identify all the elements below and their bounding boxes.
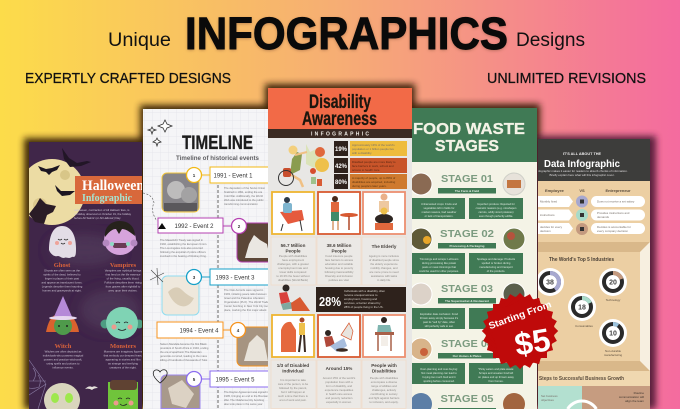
event 5 text bbox=[224, 391, 268, 406]
comparison: employee vs entrepreneur: demands bbox=[597, 215, 609, 219]
info card around 15%: experience inequalities bbox=[325, 388, 354, 392]
event 5 text: The Dayton Agreement was signed in bbox=[224, 390, 269, 394]
text: ghost description: Ghosts are often seen as the bbox=[44, 268, 80, 272]
donut: 18: 18 bbox=[578, 304, 586, 312]
donut: 10 non-durable manufacturing: manufacturing bbox=[604, 353, 623, 357]
header: Data Infographic bbox=[536, 139, 650, 181]
label: Vampires: Vampires bbox=[110, 262, 137, 269]
info card people with disabilities: People with bbox=[371, 363, 397, 368]
comparison: employee vs entrepreneur: Decides is accountable for bbox=[597, 225, 631, 229]
info card one third: 1/3 of Disabled bbox=[277, 363, 309, 368]
intro text: before All Saints' (or All Hallows') Day. bbox=[74, 216, 121, 220]
text: ghost description: spirits of the dead, believed to bbox=[43, 272, 81, 276]
icon: vampire bbox=[102, 221, 138, 255]
event 5 text: 1995, bringing an end to the Bosnian bbox=[224, 394, 268, 398]
stage 5: STAGE 05 bbox=[440, 393, 494, 405]
event 1 text: finalized in 1991, ending the era bbox=[224, 190, 263, 194]
event 2 text: The Los Angeles riots also occurred bbox=[160, 246, 203, 250]
info card 38.6 million: Diversity and inclusion bbox=[325, 274, 353, 278]
donut: 18: Consumables bbox=[575, 324, 593, 328]
heading: Designs: Designs bbox=[516, 30, 585, 51]
panel shadows bbox=[24, 84, 656, 409]
panel: Disability Awareness bbox=[268, 88, 412, 409]
event 1 text: Cold War. Additionally, the World bbox=[224, 194, 263, 198]
event 4: 4 bbox=[237, 328, 240, 333]
event 4 text: genocide occurred, leading to the mass bbox=[160, 354, 208, 358]
donut: 38: 38 bbox=[546, 280, 554, 286]
event 3 text bbox=[224, 289, 268, 312]
stat: 42%: 42% bbox=[335, 164, 348, 170]
text: monsters description: appearing in stories and film bbox=[106, 358, 141, 362]
event 5: 5 bbox=[193, 377, 196, 382]
stat: 19%: with a disability. bbox=[352, 151, 372, 155]
text: ghost description: and appear as translucent forms. bbox=[42, 280, 83, 284]
header: Food Waste Stages: FOOD WASTE bbox=[413, 121, 525, 138]
donut: 38 bbox=[536, 268, 564, 296]
event 3 text: Israel and the Palestine Liberation bbox=[224, 296, 265, 300]
stage 1: market reasons, bad weather bbox=[422, 210, 457, 214]
image card row 1 bbox=[272, 192, 405, 234]
text: witch description: powers and practice witchcraft, bbox=[44, 358, 82, 362]
stage 2: spoiled or broken during bbox=[482, 261, 511, 265]
stage 1: even though perfectly edible. bbox=[479, 214, 513, 218]
event 3 text: Organization (PLO). The World Trade bbox=[224, 300, 269, 304]
callout: 28% bbox=[316, 287, 406, 312]
stage 1: cosmetic reasons (e.g. misshapen bbox=[476, 206, 517, 210]
text: ghost description: Legends describe them haunting bbox=[42, 284, 83, 288]
icon: spider web bbox=[29, 360, 46, 409]
header: Disability Awareness bbox=[268, 88, 412, 138]
text: ghost description: homes and graveyards at night. bbox=[42, 288, 82, 292]
event 4 text: Nelson Mandela became the first Black bbox=[160, 342, 207, 346]
icon: monster bbox=[100, 307, 144, 339]
comparison: employee vs entrepreneur: Monthly fixed bbox=[540, 200, 557, 204]
info card people with disabilities: challenges, actively bbox=[372, 388, 397, 392]
event 1 bbox=[162, 167, 275, 212]
event 3 text: 1993, initiating peace talks between bbox=[224, 292, 267, 296]
steps diagram bbox=[538, 386, 650, 409]
title: INFOGRAPHICS: INFOGRAPHICS bbox=[185, 8, 508, 59]
event 4 text: the era of apartheid. The Rwandan bbox=[160, 350, 202, 354]
info card 56.7 million: lower skills compared bbox=[280, 270, 307, 274]
event 5: 1995 - Event 5 bbox=[215, 378, 255, 384]
banner: Halloween title: Infographic bbox=[82, 193, 132, 204]
illustration: seated woman bbox=[279, 284, 310, 311]
text: monsters description: that embody our deepest fears, bbox=[104, 354, 143, 358]
comparison: employee vs entrepreneur: Employee bbox=[545, 188, 565, 193]
event 2 text: involved in the beating of Rodney King. bbox=[160, 254, 207, 258]
text: monsters description: Monsters are imaginary figures bbox=[104, 350, 143, 354]
info card 38.6 million bbox=[317, 237, 361, 285]
text: witch description: influence events. bbox=[52, 366, 74, 370]
info card around 15%: Around 15% of the world's bbox=[323, 376, 356, 380]
event 2: 1992 - Event 2 bbox=[174, 224, 214, 230]
info card 38.6 million: People bbox=[331, 248, 347, 254]
event 4 text: killing of hundreds of thousands of Tutsi bbox=[160, 358, 208, 362]
info card people with disabilities: contributing to society bbox=[370, 392, 398, 396]
stage 1: Imperfect produce: Rejected for bbox=[477, 202, 515, 206]
label: Monsters: Monsters bbox=[110, 343, 136, 350]
info card the elderly: assistance with tasks bbox=[371, 274, 398, 278]
text: ghost description: linger in places of their past bbox=[45, 276, 79, 280]
header: Disability Awareness: INFOGRAPHIC bbox=[311, 132, 369, 138]
stage 1: vegetables left in fields for bbox=[423, 206, 455, 210]
stat: 19%: population or 1 billion people live bbox=[352, 147, 394, 151]
steps diagram: Set business bbox=[541, 394, 558, 398]
info card people with disabilities: Disabilities bbox=[372, 368, 397, 374]
comparison: employee vs entrepreneur: instructions bbox=[540, 213, 555, 217]
stage 4 bbox=[410, 338, 523, 384]
stage 2: STAGE 02 bbox=[440, 228, 494, 240]
stage 1: Unharvested crops: Fruits and bbox=[421, 202, 458, 206]
stage 3: The Supermarket & Restaurant bbox=[445, 299, 489, 303]
icon: sparkles bbox=[148, 120, 172, 146]
comparison: employee vs entrepreneur: VS bbox=[579, 188, 585, 193]
stage 1 bbox=[410, 173, 525, 219]
event 3: 1993 - Event 3 bbox=[215, 276, 255, 282]
event 2 text: The Maastricht Treaty was signed in bbox=[160, 238, 204, 242]
info card 56.7 million bbox=[271, 237, 316, 285]
stat: 80% bbox=[334, 174, 407, 189]
text: monsters description: as strange and terrifying bbox=[108, 362, 138, 366]
text: witch description bbox=[43, 350, 84, 370]
info card one third: care of the person, to be bbox=[278, 382, 309, 386]
comparison: employee vs entrepreneur: Entrepreneur bbox=[605, 188, 631, 193]
info card people with disabilities: and fight against barriers bbox=[369, 396, 400, 400]
event 2 bbox=[158, 218, 277, 262]
stage 3: Expiration date confusion: Food bbox=[420, 312, 458, 316]
stage 1: The Farm & Field bbox=[455, 189, 479, 193]
panel: Data Infographic bbox=[530, 139, 650, 409]
stage 2: manufacturing and transport bbox=[479, 265, 513, 269]
info card around 15%: Around 15% bbox=[326, 366, 352, 371]
stage 3: STAGE 03 bbox=[441, 283, 493, 295]
image card row 2 bbox=[272, 315, 405, 357]
info card one third: a lot of work and pain. bbox=[279, 398, 307, 402]
info card one third: but it will happen at bbox=[281, 390, 305, 394]
donut: 20 technology: Technology bbox=[606, 298, 621, 302]
stage 4: buying too much food and it bbox=[422, 375, 456, 379]
comparison: employee vs entrepreneur: Provides instructions and bbox=[597, 211, 630, 215]
stage 3: past its "sell by" date, often bbox=[423, 320, 456, 324]
text: monsters description bbox=[104, 350, 143, 370]
event 5 text: War. The Oklahoma City bombing bbox=[224, 398, 265, 402]
panel: Halloween infographic bbox=[19, 142, 144, 409]
stage 4: Not meal planning can lead to bbox=[421, 371, 457, 375]
donut: 10 non-durable manufacturing bbox=[599, 319, 627, 357]
donut: 20 technology: 20 bbox=[609, 280, 617, 286]
steps diagram: objectives bbox=[541, 398, 554, 402]
header: Data Infographic: Infographic makes it easier for readers to absorb chunks of information. bbox=[536, 169, 628, 173]
event 2 text bbox=[160, 238, 207, 258]
event 2 text: 1992, establishing the European Union. bbox=[160, 242, 207, 246]
steps diagram: align the team bbox=[625, 399, 644, 403]
stage 2: Trimmings and scraps: Leftovers bbox=[420, 257, 459, 261]
icon: skull bbox=[44, 383, 80, 409]
info card around 15%: especially in women. bbox=[326, 400, 352, 404]
info card people with disabilities bbox=[362, 360, 406, 408]
event 4: 1994 - Event 4 bbox=[179, 328, 219, 334]
stage 4: spoiling before consumed. bbox=[423, 379, 455, 383]
event 3: 3 bbox=[193, 275, 196, 280]
stage 1: carrots, oddly sized potatoes) bbox=[478, 210, 514, 214]
info card 38.6 million: education and suitable bbox=[325, 262, 353, 266]
stage 2 bbox=[410, 228, 525, 274]
callout: 28%: services, a barrier shared by bbox=[344, 301, 381, 305]
info card one third: Individual bbox=[282, 368, 304, 374]
comparison: employee vs entrepreneur: every company decision bbox=[597, 229, 628, 233]
panel: Timeline infographic bbox=[143, 109, 277, 409]
info card 38.6 million: face barriers to access bbox=[325, 258, 354, 262]
donut: 10 non-durable manufacturing: 10 bbox=[609, 330, 617, 338]
stage 1: or lack of transportation. bbox=[425, 214, 454, 218]
info card 56.7 million: to 19.3% the fewer without bbox=[277, 274, 310, 278]
comparison: employee vs entrepreneur: decides for every bbox=[540, 225, 563, 229]
header: Data Infographic: Data Infographic bbox=[544, 159, 620, 170]
stage 2: Spoilage and damage: Products bbox=[477, 257, 516, 261]
info card 38.6 million: 38.6 Million bbox=[327, 243, 352, 248]
intro text bbox=[74, 209, 131, 220]
event 1 text: The deposition of the Soviet Union bbox=[224, 186, 266, 190]
event 2: 2 bbox=[238, 224, 241, 229]
header: Data Infographic: Briefly explain here what will this infographic cover. bbox=[549, 173, 615, 177]
info card 38.6 million: following inaccessibility bbox=[325, 270, 354, 274]
panel: Food Waste Stages bbox=[410, 108, 537, 409]
info card people with disabilities: range of abilities and bbox=[371, 384, 397, 388]
icon: ghost bbox=[49, 226, 76, 258]
header: Disability Awareness: Disability bbox=[309, 92, 371, 113]
info card one third: followed by the parent, bbox=[279, 386, 307, 390]
dashed center line bbox=[218, 185, 219, 408]
event 3 text: Center bombing in New York City took bbox=[224, 304, 270, 308]
stage 4: Scraps and uneaten food left bbox=[479, 371, 513, 375]
callout: 28%: 28% of people living in the US. bbox=[344, 305, 384, 309]
event 1: 1 bbox=[193, 173, 196, 178]
text: witch description: Witches are often depicted as bbox=[45, 350, 82, 354]
tagline: unlimited revisions: UNLIMITED REVISIONS bbox=[487, 70, 646, 87]
info card one third: It is important to take bbox=[280, 378, 306, 382]
info card the elderly: in daily life. bbox=[377, 278, 391, 282]
info card 56.7 million: have employment bbox=[282, 258, 304, 262]
info card the elderly: are more prone to need bbox=[369, 270, 399, 274]
stat: 80%: A majority of people, up to 80% of bbox=[352, 176, 395, 180]
banner: Halloween title bbox=[75, 176, 144, 204]
stage 2: peels or meat trimmings that bbox=[422, 265, 456, 269]
info card people with disabilities: to inclusion, and equity. bbox=[369, 400, 399, 404]
stage 4: Our Homes & Plates bbox=[453, 354, 482, 358]
stage 2: of the products. bbox=[487, 269, 506, 273]
heading: steps to growth: Steps to Successful Business Growth bbox=[539, 376, 624, 382]
text: witch description: individuals who possess magical bbox=[43, 354, 84, 358]
icon: bat bbox=[85, 386, 98, 390]
info card people with disabilities: encompass a diverse bbox=[371, 380, 398, 384]
tagline: expertly crafted: EXPERTLY CRAFTED DESIGNS bbox=[25, 70, 231, 87]
text: vampires description: Folklore describes them rising bbox=[104, 280, 142, 284]
stage 3: still perfectly safe to eat. bbox=[425, 324, 454, 328]
info card around 15% bbox=[317, 360, 361, 408]
stat: 42%: face barriers in work, school and bbox=[352, 164, 394, 168]
text: vampires description: prey upon their victims. bbox=[109, 288, 138, 292]
info card the elderly bbox=[362, 237, 406, 285]
stage 3: thrown away simply because it's bbox=[420, 316, 459, 320]
event 4 text: president of South Africa in 1994, ending bbox=[160, 346, 209, 350]
event 5 bbox=[161, 371, 275, 408]
stage 4: "Picky eaters and plate waste: bbox=[478, 367, 514, 371]
text: vampires description bbox=[104, 268, 142, 292]
event 4 text bbox=[160, 342, 209, 362]
event 2 text: following the acquittal of police officers bbox=[160, 250, 206, 254]
illustration: wheelchair painter bbox=[278, 144, 329, 187]
subtitle: Timeline of historical events bbox=[176, 155, 259, 162]
stage 4: STAGE 04 bbox=[441, 338, 493, 350]
heading: top industries: The World's Top 5 Industries bbox=[549, 257, 614, 263]
stage 4: on plates end up thrown away bbox=[478, 375, 515, 379]
donut: 20 technology bbox=[599, 268, 627, 302]
icon: moon with bats bbox=[29, 148, 90, 225]
comparison: employee vs entrepreneur: Does not receive a set salary bbox=[597, 200, 635, 204]
badge: Starting From $5 bbox=[482, 293, 558, 369]
event 1: 1991 - Event 1 bbox=[213, 174, 253, 180]
info card one third: such a time that there is bbox=[278, 394, 308, 398]
stat: 19%: 19% bbox=[335, 147, 348, 153]
info card the elderly: The Elderly bbox=[372, 244, 397, 249]
text: monsters description: creatures of the night. bbox=[109, 366, 137, 370]
info card 38.6 million: Food insecure people bbox=[326, 254, 353, 258]
info card around 15%: in health care access bbox=[326, 392, 353, 396]
callout: 28%: Individuals with a disability often bbox=[344, 289, 386, 293]
info card 56.7 million: People with disabilities bbox=[279, 254, 308, 258]
stage 5 bbox=[410, 393, 525, 409]
info card the elderly: the elderly experience bbox=[370, 262, 398, 266]
text: vampires description: Vampires are mythical beings bbox=[105, 268, 142, 272]
info card 56.7 million: 56.7 Million bbox=[281, 243, 306, 248]
comparison: employee vs entrepreneur bbox=[530, 188, 645, 235]
event 1 text bbox=[224, 186, 266, 206]
stat: 80%: disabilities are acquired, including bbox=[352, 180, 396, 184]
stage 4: Over-planning and over-buying: bbox=[420, 367, 458, 371]
label: Ghost: Ghost bbox=[54, 262, 71, 269]
stage 4: from homes. bbox=[489, 379, 504, 383]
event 4 bbox=[157, 322, 277, 366]
stat: 19% bbox=[334, 141, 407, 156]
event 3 text: place, marking the first major attack bbox=[224, 308, 267, 312]
stat: 42%: access to health care. bbox=[352, 168, 380, 172]
title: TIMELINE: TIMELINE bbox=[182, 133, 253, 154]
text: vampires description: from graves after nightfall to bbox=[106, 284, 141, 288]
info card 38.6 million: policies are vital. bbox=[329, 278, 350, 282]
callout: 28%: employment, housing and bbox=[344, 297, 377, 301]
intro text: a holiday observed on October 31, the holiday bbox=[74, 212, 132, 216]
header: Food Waste Stages: STAGES bbox=[435, 138, 499, 155]
arrow: dashed curve bbox=[143, 193, 157, 221]
header: Food Waste Stages bbox=[412, 108, 537, 162]
event 1 text: transforming communication bbox=[224, 202, 258, 206]
icon: asterisk doodle bbox=[150, 268, 164, 285]
text: vampires description: that feed on the life essence bbox=[106, 272, 141, 276]
stat: 19%: Approximately 19% of the world's bbox=[352, 143, 395, 147]
donut: 18 bbox=[568, 293, 596, 328]
info card 56.7 million: People bbox=[285, 248, 301, 254]
text: witch description: using spells and potions to bbox=[47, 362, 80, 366]
info card people with disabilities: People with disabilities bbox=[370, 376, 399, 380]
icon: green monster bbox=[108, 380, 138, 409]
label: Witch: Witch bbox=[55, 343, 72, 350]
icon: heart doodle bbox=[153, 370, 167, 383]
header: Data Infographic: IT'S ALL ABOUT THE bbox=[563, 152, 602, 156]
title shadow: INFOGRAPHICS bbox=[185, 9, 508, 60]
stat: 42% bbox=[334, 158, 407, 173]
text: vampires description: of the living, usually blood. bbox=[107, 276, 140, 280]
info card the elderly: Ageing is more inclusive bbox=[369, 254, 400, 258]
info card 56.7 million: disabilities (World Bank) bbox=[278, 278, 308, 282]
comparison: employee vs entrepreneur: decision bbox=[540, 229, 551, 233]
stage 3 bbox=[410, 283, 525, 329]
info card one third bbox=[271, 360, 316, 408]
badge: Starting From $5: $5 bbox=[512, 321, 553, 363]
steps diagram: communication will bbox=[619, 395, 644, 399]
stat: 80%: during people's later years. bbox=[352, 184, 387, 188]
stage 2: could be used for other purposes. bbox=[419, 269, 459, 273]
3D frame: top bands bbox=[538, 242, 650, 386]
badge: Starting From $5: Starting From bbox=[487, 299, 553, 332]
stage 1: STAGE 01 bbox=[441, 173, 493, 185]
info card around 15%: and poverty reduction bbox=[326, 396, 353, 400]
header: Disability Awareness: Awareness bbox=[302, 109, 377, 130]
heading: Unique: Unique bbox=[108, 30, 171, 51]
event 5 text: also took place in the same year bbox=[224, 402, 263, 406]
stat: 80%: 80% bbox=[335, 180, 348, 186]
donut: 10 non-durable manufacturing: Non-durable bbox=[605, 349, 621, 353]
stage 2: during processing like potato bbox=[422, 261, 457, 265]
info card around 15%: population lives with a bbox=[325, 380, 353, 384]
event 1 text: Web was introduced to the public bbox=[224, 198, 264, 202]
stat: 42%: Disabled people are more likely to bbox=[352, 160, 396, 164]
info card 56.7 million: unemployment rate and bbox=[278, 266, 308, 270]
icon: witch bbox=[46, 296, 79, 335]
text: ghost description bbox=[42, 268, 83, 292]
banner: Halloween title: Halloween bbox=[82, 178, 144, 194]
info card 38.6 million: housing due to poverty bbox=[325, 266, 354, 270]
info card around 15%: form of disability, and bbox=[326, 384, 353, 388]
info card the elderly: of disabled people since bbox=[369, 258, 399, 262]
stage 2: Processing & Packaging bbox=[449, 244, 485, 248]
callout: 28%: receive unequal access to bbox=[344, 293, 378, 297]
info card 56.7 million: challenges, with a greater bbox=[277, 262, 309, 266]
event 3 text: The Oslo Accords were signed in bbox=[224, 288, 264, 292]
info card the elderly: mobility changes, and bbox=[370, 266, 398, 270]
intro text: Halloween, contraction of All Hallows' Eve, is bbox=[74, 208, 130, 212]
callout: 28%: 28% bbox=[319, 294, 341, 309]
steps diagram: Routine bbox=[634, 391, 644, 395]
event 3 bbox=[162, 269, 275, 315]
